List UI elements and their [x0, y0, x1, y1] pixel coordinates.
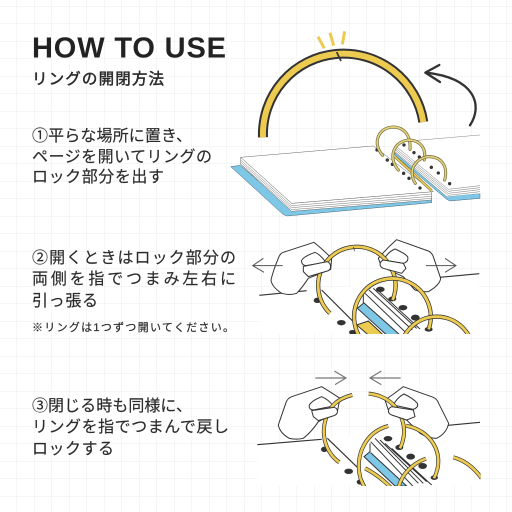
arrows: inward — [315, 371, 401, 385]
book holes — [321, 436, 438, 485]
rings — [324, 394, 482, 488]
book: yellow spine — [395, 157, 432, 191]
hands — [278, 387, 449, 439]
book holes — [314, 287, 433, 335]
step 1 text: ロック部分を出す — [32, 168, 164, 186]
hands — [271, 240, 441, 294]
illustration: step 3 — [257, 371, 482, 488]
arrow: rotation — [425, 65, 476, 125]
inner pages — [364, 438, 432, 487]
step 3 text: リングを指でつまんで戻し — [32, 418, 229, 436]
fingers over ring — [303, 260, 406, 277]
icon: sparkle lines — [318, 31, 345, 48]
step 3 text: ロックする — [32, 440, 114, 458]
page background — [259, 274, 479, 334]
icon: enlarged ring — [263, 52, 423, 137]
step 2 text: ②開くときはロック部分の — [32, 249, 236, 267]
step 2 text: 引っ張る — [32, 292, 98, 310]
step 3 text: ③閉じる時も同様に、 — [32, 397, 192, 415]
inner pages — [357, 288, 420, 335]
page edge lines — [259, 274, 479, 322]
illustration: step 2 — [252, 239, 480, 334]
fingers over ring — [312, 407, 415, 421]
step 1 text: ①平らな場所に置き、 — [32, 127, 192, 145]
subtitle: リングの開閉方法 — [32, 70, 164, 88]
rings — [316, 244, 470, 334]
illustration: step 1 — [231, 31, 480, 216]
step 2 text: 両側を指でつまみ左右に — [32, 270, 236, 288]
note: ※リングは1つずつ開いてください。 — [32, 320, 234, 334]
step 1 text — [32, 127, 212, 186]
icon: small rings — [377, 127, 446, 183]
page edge lines — [257, 422, 480, 468]
book: left block — [231, 146, 433, 216]
book: right block — [395, 135, 480, 201]
step 3 text — [32, 397, 229, 458]
step 1 text: ページを開いてリングの — [32, 148, 212, 166]
book: page holes — [375, 143, 451, 190]
page background — [257, 422, 480, 486]
arrows: outward — [253, 258, 456, 272]
step 2 text — [32, 249, 236, 310]
title: HOW TO USE — [32, 32, 226, 64]
